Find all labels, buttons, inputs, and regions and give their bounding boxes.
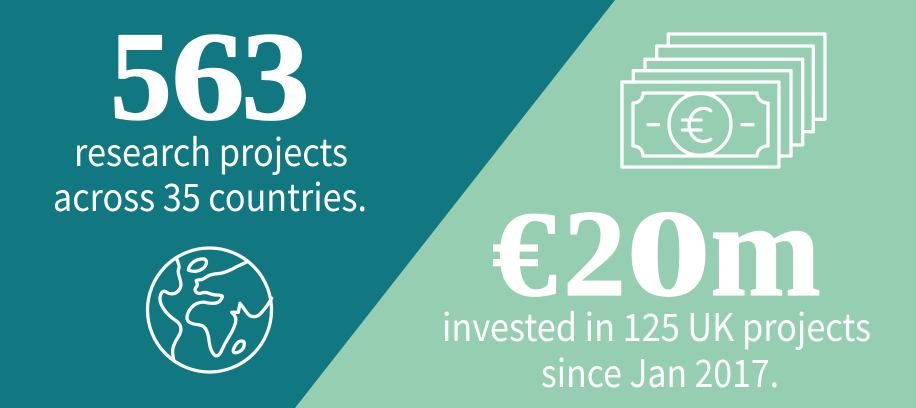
eurasia and africa outline: [187, 262, 272, 356]
heading: €20m: [492, 176, 821, 325]
banknote inner border: [633, 93, 768, 156]
americas outline: [160, 259, 181, 361]
text block: invested in 125 UK projects since Jan 2017: invested in 125 UK projects: [442, 297, 871, 352]
heading: €20m: 0: [626, 185, 711, 322]
text block: invested in 125 UK projects since Jan 2017: since Jan 2017.: [541, 343, 779, 398]
greenland outline: [188, 259, 206, 271]
icon: stack of euro banknotes: [622, 34, 825, 167]
heading: 563: [110, 7, 310, 147]
icon: globe: [148, 248, 272, 372]
heading: €20m: €: [492, 187, 557, 322]
text block: research projects across 35 countries: [53, 122, 367, 222]
banknote dashes: [648, 123, 753, 126]
panel: teal diagonal: [0, 0, 615, 408]
heading: 563: 5: [110, 7, 172, 147]
front banknote: [622, 82, 779, 167]
heading: 563: 3: [241, 7, 310, 147]
text block: research projects across 35 countries: across 35 countries.: [53, 167, 367, 222]
text block: invested in 125 UK projects since Jan 2017: [442, 297, 871, 398]
back banknotes: [668, 34, 825, 119]
heading: 563: 6: [171, 7, 245, 147]
text block: research projects across 35 countries: research projects: [74, 122, 348, 177]
heading: €20m: m: [710, 176, 821, 325]
euro sign: [689, 108, 711, 142]
euro medallion: [669, 93, 731, 155]
madagascar outline: [233, 341, 244, 353]
heading: €20m: 2: [563, 185, 626, 322]
